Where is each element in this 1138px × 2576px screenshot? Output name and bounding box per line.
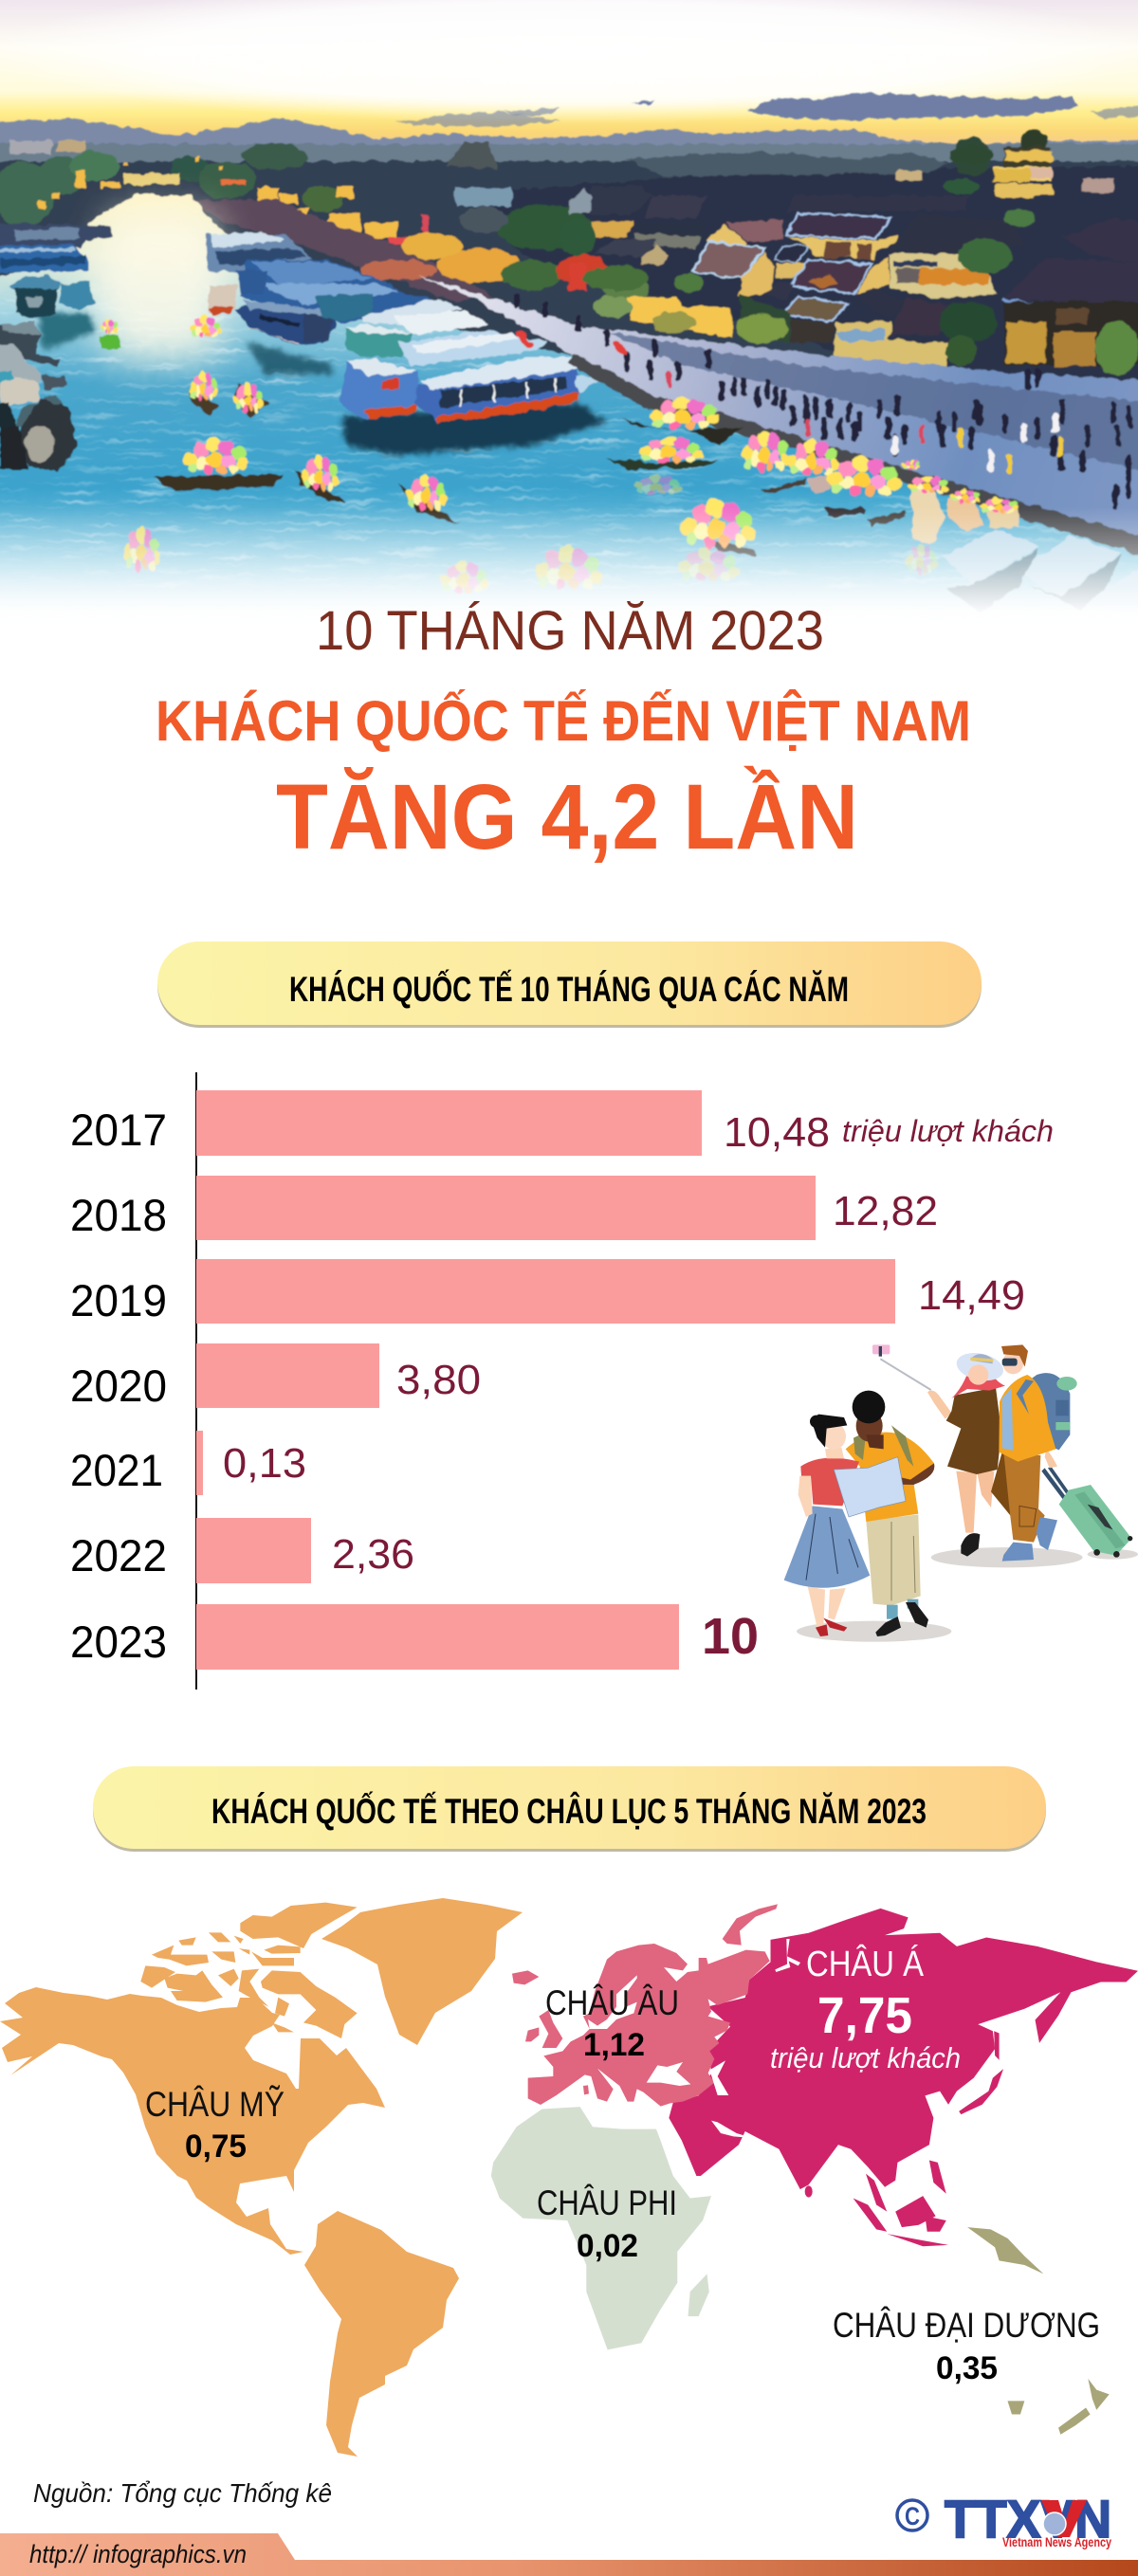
ground shadows [797,1547,1138,1642]
photo scene [0,93,1138,628]
lit tall building [994,147,1053,197]
blue boat with red hull [340,362,419,419]
bar 2017: 2017 [70,1105,167,1155]
South America [304,2211,459,2457]
boat near left [152,437,283,491]
dark reflections [38,313,607,455]
town base [0,144,1138,408]
footer band [0,2533,1138,2576]
man with backpack [991,1344,1077,1562]
water ripples [0,300,1108,578]
teal boats [344,324,414,357]
bar 2023 [70,1604,759,1670]
lantern boats on the water [100,315,1138,619]
bar 2021: 0,13 [223,1440,306,1487]
bank crowd and lit trees [194,188,649,302]
bar chart: visitors by year [70,1072,1054,1690]
title: khách quốc tế đến Việt Nam: KHÁCH QUỐC TẾ ĐẾN VIỆT NAM [156,689,971,753]
bar 2018 [70,1176,938,1240]
source note: Nguồn: Tổng cục Thống kê [33,2478,332,2508]
bar 2020: 2020 [70,1361,167,1411]
title: 10 tháng năm 2023: 10 THÁNG NĂM 2023 [316,600,824,662]
continent: Oceania [967,2227,1110,2435]
clouds [394,93,1138,127]
bar 2020: 3,80 [396,1357,481,1403]
label: Châu Âu [545,1983,679,2063]
bar 2019 [70,1259,1025,1325]
upstream boats [100,315,268,572]
crowd on promenade [517,296,1129,507]
front boat [415,362,579,422]
section heading: bar chart [157,941,982,1028]
section heading: map [93,1766,1046,1852]
promenade [417,275,1138,545]
label: Châu Đại Dương: 0,35 [936,2350,998,2386]
Asia inland seas [709,1939,800,2138]
riverside houses [560,145,1138,386]
label: Châu Phi: 0,02 [577,2228,638,2264]
mountains [0,118,1138,163]
section heading: map: KHÁCH QUỐC TẾ THEO CHÂU LỤC 5 THÁNG NĂM 2023 [211,1791,927,1831]
lower left boat [0,398,78,472]
label: Châu Á [770,1944,961,2074]
label: Châu Âu: CHÂU ÂU [545,1983,679,2022]
trees left bank [0,143,343,227]
skyline blocks [9,129,1047,176]
North America mainland [0,1987,385,2255]
bar 2017: 10,48 [724,1109,830,1156]
river [0,194,1138,628]
woman with skirt [784,1415,870,1636]
map [834,1457,906,1517]
continent: Asia [669,1909,1138,2246]
footer url: http:// infographics.vn [29,2540,247,2568]
man with map [846,1391,934,1636]
tourist boats on the right bank [206,232,602,422]
label: Châu Phi [537,2183,677,2264]
promenade inner road [607,332,1138,474]
woman with selfie stick [872,1344,1006,1557]
quay wall [569,353,1138,559]
logo: TTXVN: TTXVN [945,2489,1111,2549]
bar 2017 [70,1090,1054,1156]
sky [0,0,1138,156]
bar 2018: 2018 [70,1190,167,1240]
label: Châu Âu: 1,12 [583,2027,645,2063]
far lantern reflections [440,545,602,594]
label: Châu Phi: CHÂU PHI [537,2183,677,2222]
label: Châu Mỹ [145,2085,284,2165]
world map by continent [0,1898,1138,2457]
bar 2023: 10 [702,1608,759,1665]
water glint [85,213,228,360]
navy boat [235,305,337,345]
left bank moored boats [0,223,111,427]
bar 2023: 2023 [70,1617,167,1667]
bar 2019: 14,49 [918,1272,1025,1319]
photo: Hoi An riverside at dusk [0,0,1138,658]
section heading: bar chart: KHÁCH QUỐC TẾ 10 THÁNG QUA CÁC NĂM [289,969,849,1009]
white fade at photo bottom [0,507,1138,658]
Canadian Arctic islands [140,1903,358,2038]
Greenland [321,1898,523,2045]
continent: Europe [512,1904,778,2107]
continent: Americas [0,1898,523,2457]
label: Châu Á: triệu lượt khách [770,2041,961,2074]
bar 2022: 2,36 [332,1531,414,1578]
lantern cluster by quay [607,396,1138,619]
bar 2021: 2021 [70,1445,163,1495]
label: Châu Đại Dương [833,2306,1100,2386]
boat centre left [296,454,346,502]
copyright mark: C [905,2502,920,2530]
label: Châu Mỹ: CHÂU MỸ [145,2085,284,2124]
bar 2017: triệu lượt khách [842,1114,1054,1148]
label: Châu Mỹ: 0,75 [185,2128,247,2165]
town lights [38,156,428,245]
suitcase [1041,1467,1132,1558]
boat centre [398,473,460,523]
bar 2022: 2022 [70,1530,167,1580]
bar 2019: 2019 [70,1275,167,1325]
copyright mark [897,2500,927,2530]
label: Châu Á: 7,75 [817,1987,912,2044]
title: tăng 4,2 lần: TĂNG 4,2 LẦN [276,765,858,868]
label: Châu Á: CHÂU Á [806,1944,925,1984]
continent: Africa [491,2107,711,2349]
bar 2020 [70,1343,481,1411]
bar 2018: 12,82 [833,1188,938,1234]
bar 2022 [70,1518,414,1583]
canopies lower right [943,529,1138,619]
bar 2021 [70,1431,306,1495]
illustration: tourists [784,1344,1138,1642]
